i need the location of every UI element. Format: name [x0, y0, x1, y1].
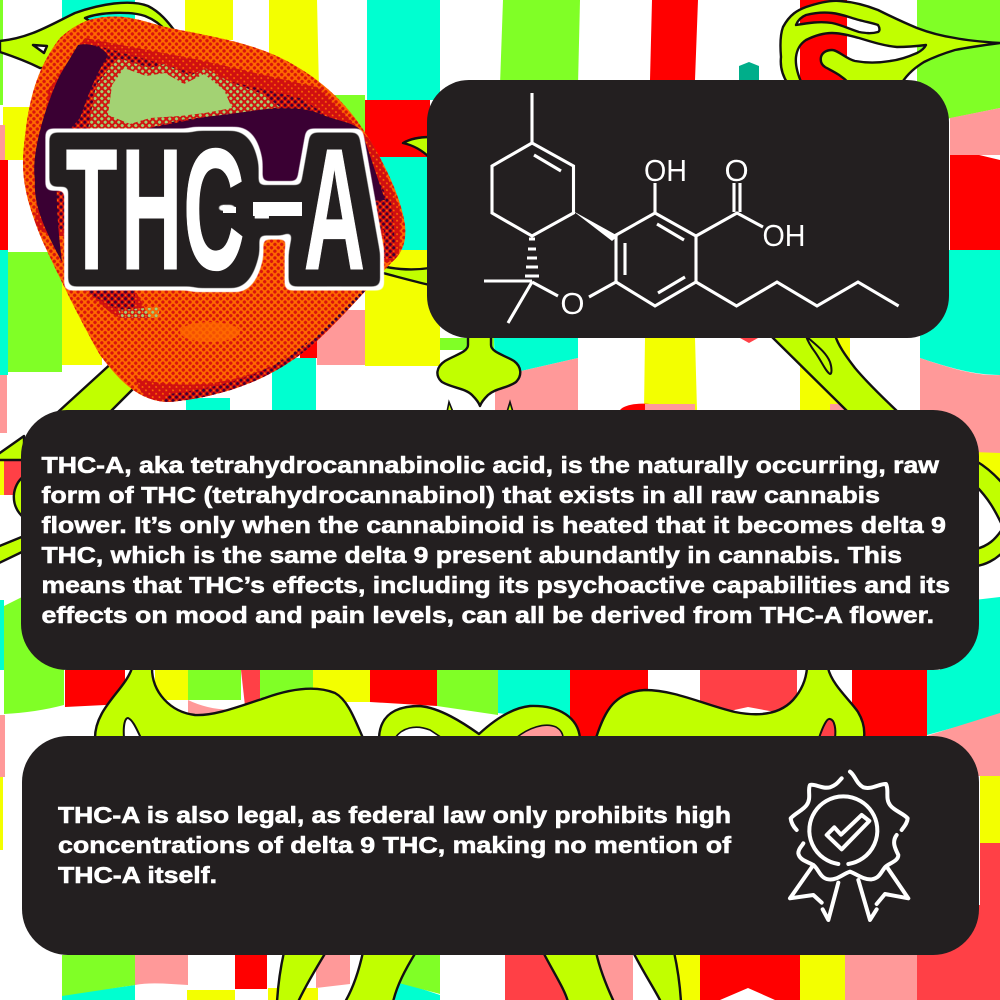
- leaf opening: stem: [806, 336, 832, 374]
- legal text: [58, 802, 731, 888]
- title letters with outline: C: [183, 113, 244, 306]
- molecule bonds: [484, 93, 899, 323]
- lower lip highlight: [180, 322, 240, 342]
- title letters with outline: A: [304, 113, 365, 306]
- leaf: top right: [780, 1, 1000, 84]
- leaf: right edge lower band: [976, 528, 1000, 566]
- upper shade dots: [45, 45, 396, 258]
- description text: THC, which is the same delta 9 present abundantly in cannabis. This: [42, 542, 902, 568]
- inner lip shadow: [86, 290, 150, 318]
- label: ring O: O: [560, 286, 584, 321]
- description text: flower. It’s only when the cannabinoid is heated that it becomes delta 9: [42, 512, 946, 538]
- leaf: spade under molecule: [437, 335, 520, 406]
- hyphen fragment inside C: [223, 205, 236, 213]
- leaf: stem under molecule: [770, 335, 898, 412]
- lips halftone: [22, 16, 406, 402]
- dark mouth interior: [34, 44, 108, 262]
- leaf: lower right: [596, 668, 864, 738]
- title letters with outline: -: [253, 142, 271, 264]
- teeth halftone edge: [88, 58, 280, 132]
- label: carbonyl O: O: [724, 153, 749, 188]
- stems below legal panel: [277, 952, 681, 1000]
- label: OH top: OH: [644, 153, 687, 188]
- leaf opening: bow right: [516, 725, 563, 738]
- icon: award badge with check: [790, 772, 908, 920]
- teeth halftone dots: [88, 58, 280, 132]
- wedge bond: [573, 211, 618, 241]
- dark mouth band: [147, 108, 385, 201]
- spikes above text panel: [447, 402, 513, 412]
- title: THC-A: [66, 113, 365, 306]
- leaf opening: bow left: [395, 727, 442, 738]
- panel: description: [21, 410, 979, 670]
- leaf opening: lower left: [124, 718, 141, 738]
- leaf: left edge lobe: [14, 476, 24, 518]
- leaf: right edge upper band: [976, 461, 1000, 527]
- legal text: THC-A is also legal, as federal law only prohibits high: [58, 802, 731, 828]
- leaf: left edge lower band: [0, 536, 24, 564]
- legal text: concentrations of delta 9 THC, making no mention of: [58, 832, 731, 858]
- leaf: stem under mouth: [58, 360, 140, 412]
- leaf: central bow: [379, 706, 580, 738]
- bottom shade dots: [164, 290, 365, 402]
- title letters with outline: H: [121, 113, 182, 306]
- legal text: THC-A itself.: [58, 862, 217, 888]
- description text: [42, 452, 950, 628]
- hyphen bar: [253, 202, 302, 216]
- leaf fragment: right of mouth lower: [375, 264, 430, 285]
- panel: legal note: [22, 736, 979, 955]
- lips halftone blob: [22, 16, 406, 402]
- inner lip shadow dots: [85, 290, 135, 312]
- title letters with outline: [66, 113, 365, 306]
- lips base: [22, 16, 406, 402]
- description text: THC-A, aka tetrahydrocannabinolic acid, is the naturally occurring, raw: [42, 452, 940, 478]
- panel: molecule: [427, 80, 949, 338]
- label: acid OH: OH: [762, 218, 806, 253]
- teeth: [108, 68, 232, 124]
- title letters with outline: T: [66, 113, 117, 306]
- leaf: lower left: [95, 668, 363, 738]
- leaf fragment: right of mouth upper: [403, 137, 430, 158]
- upper shade: [34, 38, 402, 262]
- description text: form of THC (tetrahydrocannabinol) that exists in all raw cannabis: [42, 482, 880, 508]
- lower teeth glint: [118, 307, 160, 318]
- leaf: top left: [0, 3, 174, 70]
- bottom shade: [135, 290, 366, 402]
- description text: means that THC’s effects, including its psychoactive capabilities and its: [42, 572, 950, 598]
- leaf: left edge upper band: [0, 436, 24, 460]
- leaf opening: lower right: [819, 719, 835, 738]
- description text: effects on mood and pain levels, can all be derived from THC-A flower.: [42, 602, 934, 628]
